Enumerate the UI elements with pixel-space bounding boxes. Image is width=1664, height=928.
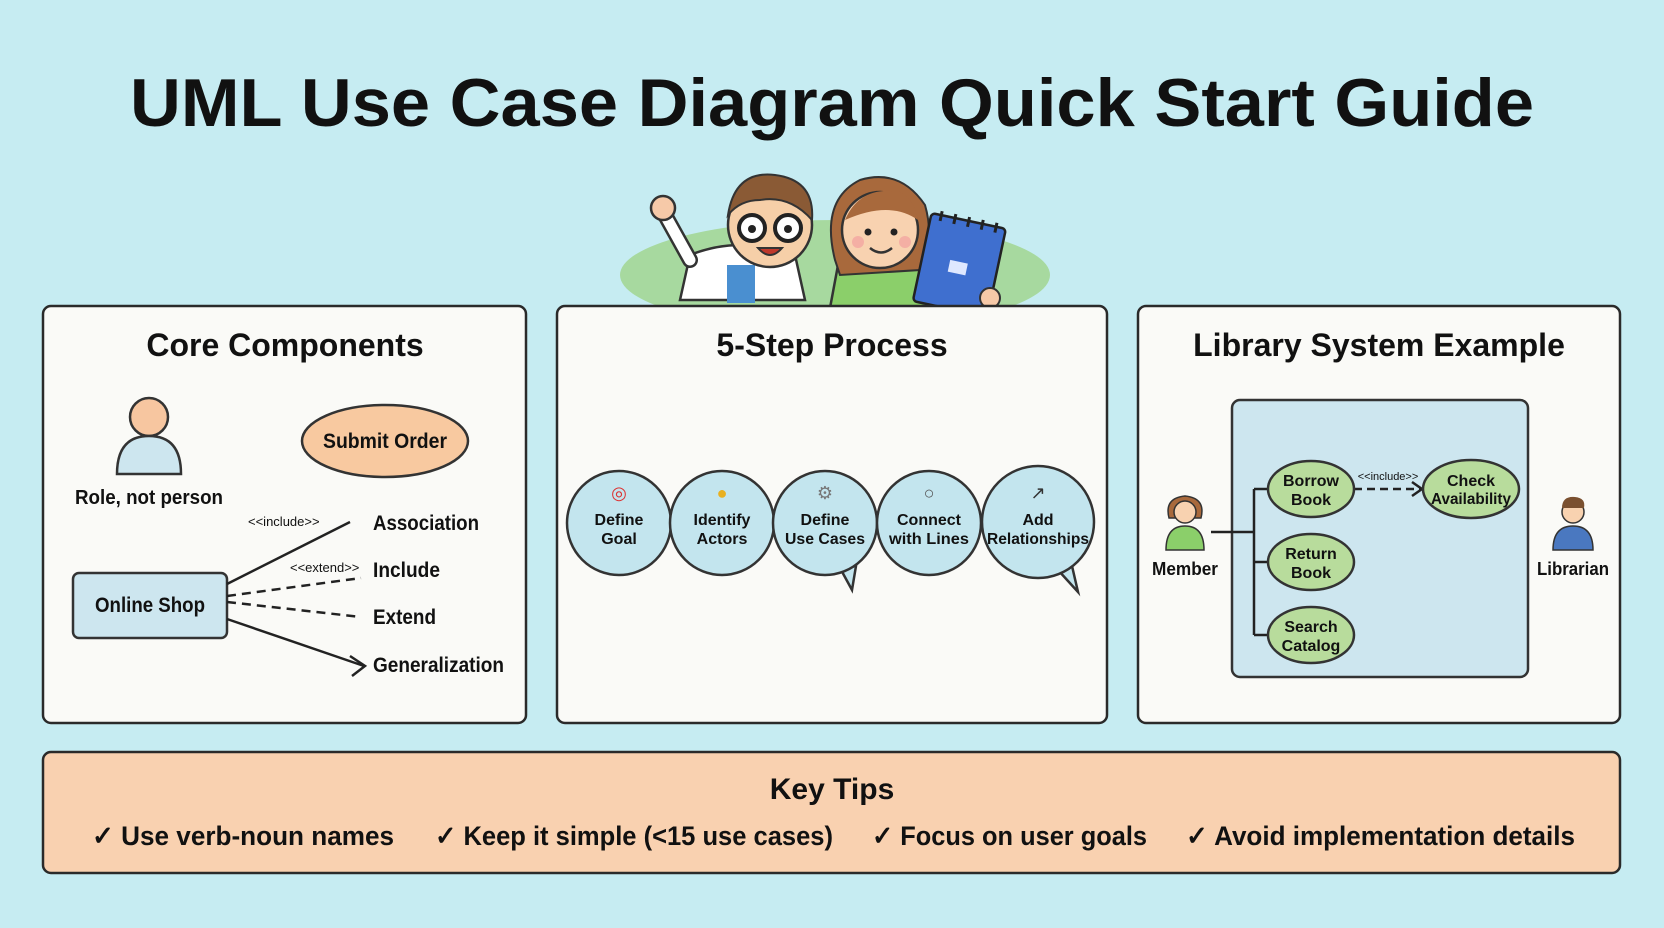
relationship labels: [248, 512, 504, 677]
heading: 5-step process: 5-Step Process: [716, 327, 948, 363]
step bubbles: [567, 466, 1094, 592]
step labels: Add: [1022, 512, 1054, 529]
tip items: ✓ Focus on user goals: [872, 821, 1147, 851]
system box: online shop: [73, 573, 227, 638]
icon: actor: [117, 398, 181, 474]
relationship labels: Extend: [373, 606, 436, 629]
step labels: Define: [801, 512, 850, 529]
step icons: ○: [924, 483, 934, 503]
panel: library system example: Availability: [1431, 491, 1511, 508]
step labels: with Lines: [888, 531, 969, 548]
panel: 5-step process: [557, 306, 1107, 723]
title: UML Use Case Diagram Quick Start Guide: [130, 65, 1534, 141]
use case: submit order: Submit Order: [323, 430, 447, 453]
step labels: Actors: [697, 531, 747, 548]
step icons: ⚙: [817, 483, 833, 503]
step labels: Relationships: [987, 531, 1089, 548]
tip items: ✓ Avoid implementation details: [1186, 821, 1575, 851]
step labels: Identify: [694, 512, 751, 529]
step labels: Connect: [897, 512, 962, 529]
relationship labels: Include: [373, 559, 440, 582]
step icons: [611, 483, 1046, 503]
heading: core components: Core Components: [146, 327, 424, 363]
actor: member: Member: [1152, 559, 1218, 579]
panel: library system example: Catalog: [1282, 638, 1340, 655]
use cases: [1268, 460, 1519, 663]
panel: library system example: Return: [1285, 546, 1337, 563]
panel: core components: [43, 306, 526, 723]
step labels: [595, 512, 1089, 548]
relationship labels: Generalization: [373, 654, 504, 677]
actor: librarian: [1537, 497, 1609, 579]
system boundary: [1232, 400, 1528, 677]
step labels: Goal: [601, 531, 637, 548]
system box: online shop: Online Shop: [95, 594, 205, 617]
panel: library system example: [1138, 306, 1620, 723]
heading: key tips: Key Tips: [770, 773, 894, 806]
step icons: ●: [717, 483, 727, 503]
panel: key tips: [43, 752, 1620, 873]
actor: librarian: Librarian: [1537, 559, 1609, 579]
step icons: ◎: [611, 483, 627, 503]
tip items: ✓ Keep it simple (<15 use cases): [435, 821, 833, 851]
relationship labels: <<extend>>: [290, 560, 359, 575]
tip items: ✓ Use verb-noun names: [92, 821, 394, 851]
relationship lines: [227, 522, 365, 676]
use case: submit order: [302, 405, 468, 477]
connectors: [1211, 482, 1422, 635]
step icons: ↗: [1030, 483, 1046, 503]
step labels: Use Cases: [785, 531, 865, 548]
heading: library system example: Library System Example: [1193, 327, 1565, 363]
panel: library system example: <<include>>: [1358, 471, 1418, 483]
label: role, not person: Role, not person: [75, 487, 223, 509]
illustration: two characters: [620, 174, 1050, 330]
panel: library system example: Book: [1291, 565, 1331, 582]
panel: library system example: Borrow: [1283, 473, 1340, 490]
actor: member: [1152, 496, 1218, 579]
panel: library system example: Check: [1447, 473, 1495, 490]
step labels: Define: [595, 512, 644, 529]
panel: library system example: Search: [1284, 619, 1338, 636]
tip items: [92, 821, 1575, 851]
panel: library system example: Book: [1291, 492, 1331, 509]
relationship labels: Association: [373, 512, 479, 535]
relationship labels: <<include>>: [248, 514, 320, 529]
